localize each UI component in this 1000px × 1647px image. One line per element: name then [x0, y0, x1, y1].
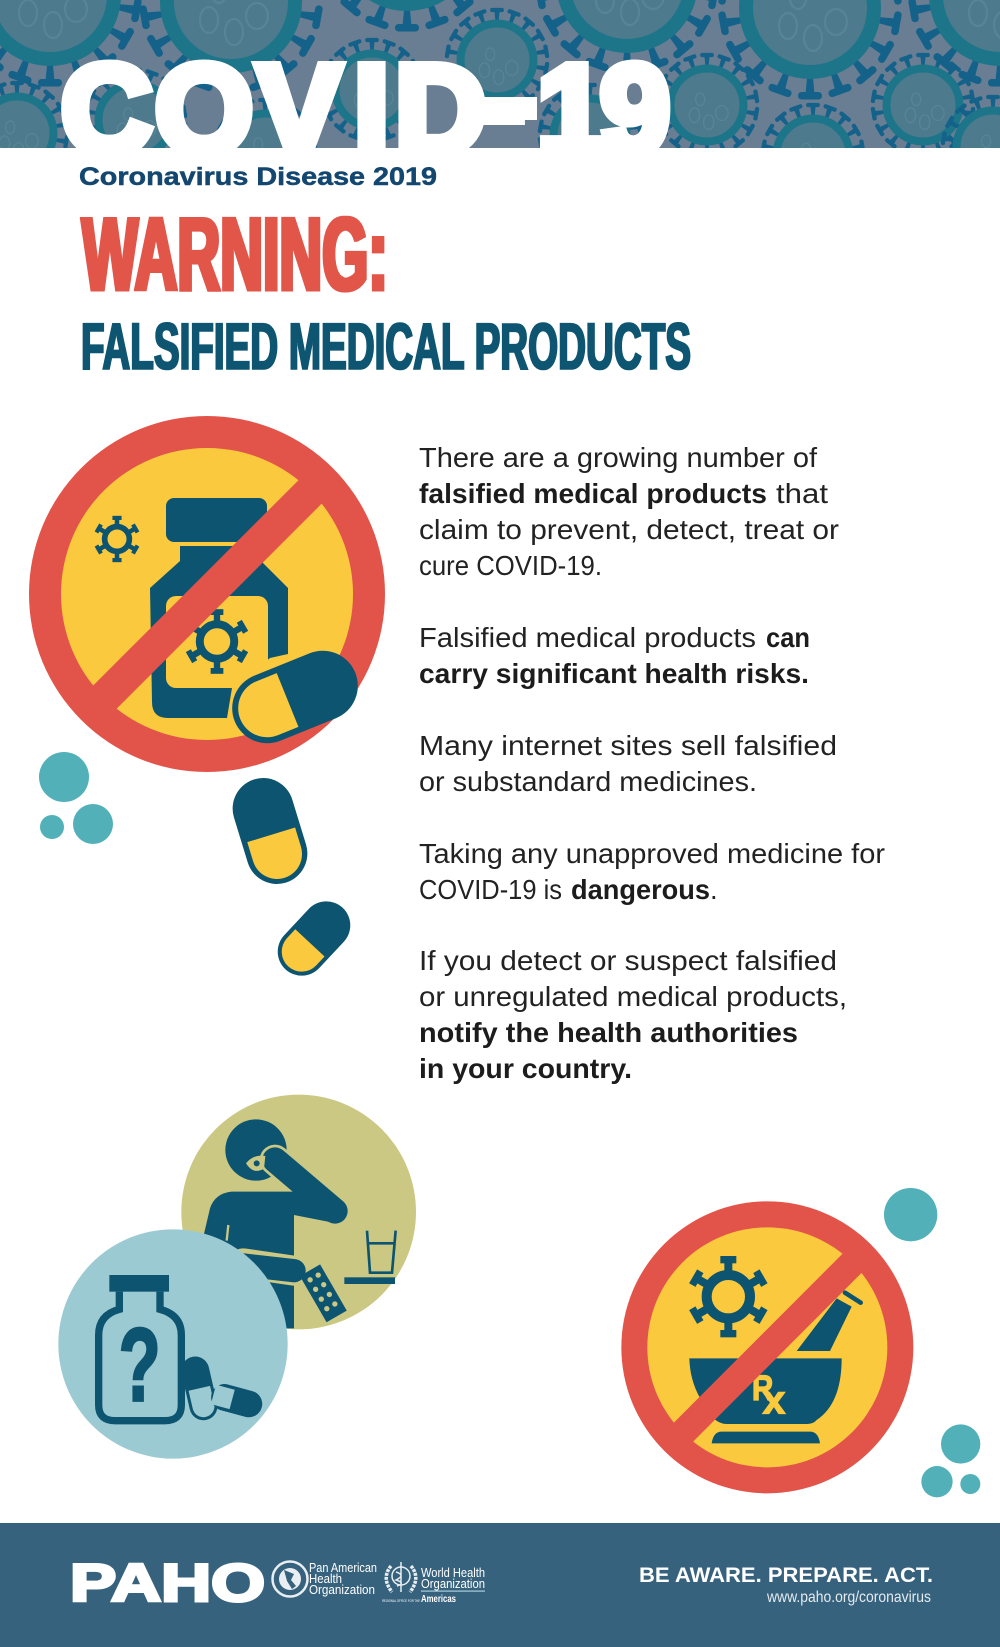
text block: growing number: that [776, 478, 828, 509]
text block: growing number: falsified medical products [419, 478, 767, 509]
icon: small falling capsule [268, 891, 360, 986]
title: COVID-19: COVID-19 [61, 31, 670, 180]
website: www.paho.org/coronavirus [766, 1589, 931, 1606]
text block: growing number [419, 442, 839, 581]
text block: unapproved medicine: . [710, 874, 718, 905]
text block: growing number: cure COVID-19. [419, 550, 602, 581]
subtitle: Coronavirus Disease 2019 [79, 163, 437, 191]
text: Pan American Health Organization: Health [309, 1572, 342, 1586]
text block: unapproved medicine: COVID-19 is [419, 874, 562, 905]
text block: unapproved medicine: Taking any unapproved medicine for [419, 838, 885, 869]
text block: internet sites: Many internet sites sell falsified [419, 730, 837, 761]
icon: bottle [150, 498, 288, 718]
text block: health risks: Falsified medical products [419, 622, 756, 653]
text: Pan American Health Organization: Pan American [309, 1561, 377, 1575]
text block: notify authorities: or unregulated medical products, [419, 981, 847, 1012]
text: World Health Organization Americas: REGIONAL OFFICE FOR THE [382, 1598, 420, 1603]
icon: capsule on sign [222, 640, 368, 754]
icon: unknown medicine bottle: ? [119, 1308, 161, 1424]
icon: prohibited mortar and pestle: x [763, 1378, 785, 1422]
text: World Health Organization Americas [382, 1565, 485, 1605]
text: Pan American Health Organization: Organization [309, 1583, 375, 1597]
logo: WHO emblem [386, 1562, 416, 1592]
heading: warning: WARNING: [82, 197, 388, 313]
text block: growing number: claim to prevent, detect, treat or [419, 514, 839, 545]
text block: growing number: There are a growing number of [419, 442, 817, 473]
icon: prohibited mortar and pestle [621, 1201, 913, 1493]
text block: notify authorities: notify the health authorities [419, 1017, 798, 1048]
text block: internet sites: or substandard medicines. [419, 766, 757, 797]
text block: notify authorities: in your country. [419, 1053, 632, 1084]
text block: notify authorities [419, 945, 847, 1084]
icon: person taking pills [181, 1095, 416, 1329]
footer band [0, 1523, 1000, 1647]
text: World Health Organization Americas: Americas [421, 1594, 456, 1605]
icon: falling capsule [225, 770, 315, 892]
icon: prohibited mortar and pestle: R [752, 1369, 773, 1408]
logo: PAHO wordmark: PAHO [70, 1554, 265, 1613]
decorative bubbles right [884, 1188, 980, 1497]
text block: unapproved medicine: dangerous [571, 874, 710, 905]
text block: health risks: carry significant health risks. [419, 658, 809, 689]
icon: small virus [95, 516, 139, 562]
text: Pan American Health Organization [309, 1561, 377, 1597]
text block: unapproved medicine [419, 838, 885, 905]
text block: health risks [419, 622, 810, 689]
logo: PAHO emblem [272, 1562, 308, 1596]
banner: virus pattern [0, 0, 1000, 207]
icon: prohibited medicine bottle [29, 416, 385, 772]
tagline: BE AWARE. PREPARE. ACT. [639, 1564, 933, 1587]
text block: notify authorities: If you detect or suspect falsified [419, 945, 837, 976]
icon: unknown medicine bottle [58, 1229, 288, 1459]
decorative bubbles left [39, 752, 113, 844]
text block: internet sites [419, 730, 837, 797]
text block: health risks: can [766, 622, 810, 653]
prohibition slash [91, 479, 323, 711]
text: World Health Organization Americas: World Health [421, 1565, 485, 1580]
text: World Health Organization Americas: Organization [421, 1576, 485, 1591]
